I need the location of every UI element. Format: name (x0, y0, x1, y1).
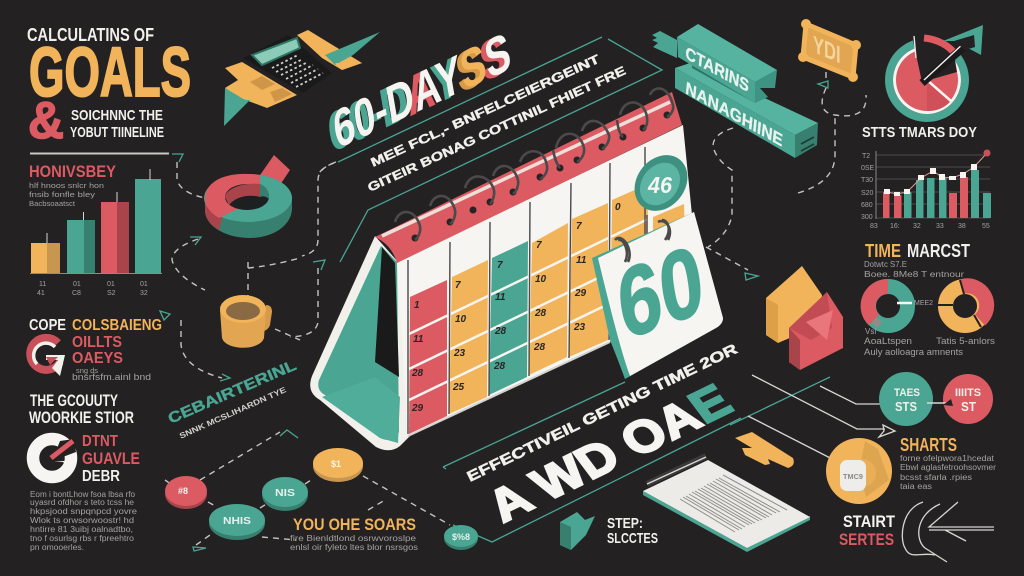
teal day tag: 46 (647, 172, 672, 198)
day numbers: 29 (574, 288, 587, 299)
day numbers: 28 (411, 368, 424, 379)
chart y labels: T30 (861, 177, 873, 184)
day numbers: 10 (535, 274, 547, 285)
panel: cope collaborating (29, 317, 162, 382)
day numbers: 7 (455, 280, 461, 291)
node: teal large: NHIS (223, 516, 251, 527)
panel: the county workie stior: DEBR (82, 468, 120, 485)
day numbers: 10 (455, 314, 467, 325)
body paragraph: tno f osurlsg rbs r fpreehtro (30, 534, 135, 543)
banner: effective time: EFFECTIVEIL GETING TIME 2OR (465, 341, 741, 486)
day numbers: 28 (533, 342, 546, 353)
text box: intro banner: MEE FCL,- BNFELCEIERGEINT (369, 52, 602, 170)
icon: pie chart with arrow (889, 25, 983, 118)
day numbers: 25 (452, 382, 465, 393)
callout: start series: SERTES (839, 530, 894, 549)
spiral rings (395, 88, 673, 242)
body paragraph: hkpsjood snpqnpcd yovre (30, 507, 138, 516)
body paragraph: hntirre 81 3uibj oalnadtbo, (30, 525, 133, 534)
day numbers: 28 (493, 361, 506, 372)
node: small teal (444, 525, 478, 550)
block: channels teal top (652, 24, 777, 103)
body paragraph: pn omooerles. (30, 543, 84, 552)
node: yellow: $1 (331, 459, 341, 469)
text box: intro banner (318, 37, 662, 262)
block: management teal bottom (675, 63, 818, 158)
calendar face (397, 125, 692, 436)
panel: time market donuts: Vsl (865, 327, 876, 336)
panel: cope collaborating: OILLTS (72, 334, 122, 351)
icon: yellow sign: YDI (813, 31, 841, 69)
red binding bar (375, 92, 682, 263)
icon: yellow circle with badge: TMC9 (843, 474, 863, 481)
calendar base edge (408, 342, 610, 436)
bars (30, 169, 162, 274)
panel: time market donuts (864, 241, 996, 357)
timeline nodes (165, 357, 478, 550)
node: teal large (209, 504, 265, 540)
chart description: hlf hnoos snlcr hon (29, 181, 104, 190)
axis labels: 32 (140, 290, 148, 297)
block: management teal bottom: NANAGHIINE (685, 78, 784, 151)
icon: document sheet (643, 456, 810, 552)
icon: teal folder and step label: SLCCTES (607, 530, 658, 547)
chart description (29, 181, 104, 208)
node: teal circle: STS (895, 399, 917, 414)
panel: bar chart with heading (29, 162, 162, 297)
day numbers: 7 (576, 221, 582, 232)
panel: the county workie stior: WOORKIE STIOR (29, 408, 134, 427)
chart x labels: 55 (982, 223, 990, 230)
panel: time market donuts: Boee. 8Me8 T entnour (864, 270, 964, 279)
body paragraph (30, 490, 138, 552)
heading: goals: GOALS (29, 33, 191, 111)
day numbers: 11 (495, 292, 506, 303)
chart bars (883, 170, 991, 218)
chart x labels (870, 223, 990, 230)
chart y labels (861, 153, 875, 221)
panel: the county workie stior: GUAVLE (82, 449, 140, 468)
axis labels: C8 (72, 290, 81, 297)
title: 60-days isometric: 60-DAYSS (324, 25, 510, 164)
icon: isometric calculator with arrows (224, 30, 380, 126)
panel: cope collaborating: bnsrfsfm.ainl bnd (72, 372, 151, 382)
node: small teal: $%8 (452, 532, 470, 542)
panel: sharts: bcsst sfarla .rpies (900, 473, 972, 482)
day numbers: 1 (414, 300, 420, 311)
panel: time market donuts: AoaLtspen (864, 336, 912, 346)
node: yellow (313, 448, 363, 482)
block: channels teal top: CTARINS (685, 43, 750, 96)
icon: teal folder and step label: STEP: (607, 515, 643, 532)
title block: goals (27, 25, 191, 150)
heading: calculations of: CALCULATINS OF (27, 25, 154, 45)
day numbers: 11 (576, 255, 587, 266)
icon: 3D ring (204, 155, 292, 238)
panel: sharts: taia eas (900, 482, 932, 491)
chart x labels: 16: (890, 223, 900, 230)
panel: sharts: Ebwl aglasfetroohsovmer (900, 463, 996, 472)
body paragraph: Wlok ts orwsorwoostr! hd (30, 516, 134, 525)
heading: stats: STTS TMARS DOY (862, 124, 977, 141)
panel: sharts: forne ofelpwora1hcedat (900, 454, 995, 463)
node: red: #8 (178, 486, 188, 496)
node: red circle: IIIITS (955, 387, 981, 399)
axis labels: 01 (107, 281, 115, 288)
node: teal medium: NIS (275, 488, 295, 499)
axis labels: 41 (37, 290, 45, 297)
panel: description label: CEBAIRTERINL (166, 357, 299, 428)
icon: isometric envelopes (766, 266, 843, 370)
callout: start series: STAIRT (843, 512, 896, 531)
day numbers: 0 (615, 202, 621, 213)
text box: intro banner: GITEIR BONAG COTTINIL FHIET FRE (366, 64, 628, 195)
panel: description label (166, 357, 299, 441)
axis labels (37, 281, 148, 297)
panel: time market donuts: TIME (865, 241, 901, 261)
ampersand: & (28, 92, 64, 150)
chart heading: HONIVSBEY (29, 162, 117, 181)
panel: the county workie stior (29, 391, 140, 552)
chart y labels: 680 (861, 202, 873, 209)
caption: you ohe soars (290, 515, 418, 552)
banner: effective time (443, 341, 830, 542)
icon: G red ring (30, 338, 65, 376)
donut: right (938, 280, 987, 327)
chart y labels: T2 (862, 153, 870, 160)
node: red (165, 476, 207, 509)
day numbers: 29 (411, 403, 424, 414)
chart y labels: 0SE (861, 165, 875, 172)
day numbers: 11 (413, 334, 424, 345)
panel: sharts: SHARTS (900, 435, 957, 455)
day numbers: 23 (453, 348, 466, 359)
day numbers: 7 (536, 240, 542, 251)
panel: cope collaborating: COLSBAIENG (72, 317, 162, 334)
chart y labels: S20 (861, 190, 874, 197)
chart description: fnsib fonfle bley (29, 190, 95, 199)
day columns (409, 184, 686, 434)
icon: yellow sign (798, 19, 861, 82)
caption: you ohe soars: YOU OHE SOARS (293, 515, 416, 534)
callout: start series (839, 512, 896, 549)
day numbers: 7 (497, 260, 503, 271)
chart x labels: 33 (936, 223, 944, 230)
body paragraph: Eom i bontLhow fsoa lbsa rfo (30, 490, 136, 499)
icon: yellow circle with badge (826, 438, 892, 504)
chart y labels: 300 (861, 214, 873, 221)
panel: time market donuts: Dotwtc S7.E (864, 260, 907, 269)
banner: effective time: A WD OA E (478, 376, 742, 532)
tear-off page 60: 60 (611, 225, 710, 361)
panel: the county workie stior: DTNT (82, 433, 118, 450)
axis labels: 01 (140, 281, 148, 288)
caption: you ohe soars: fire Bienldtlond osrwvoroslpe (290, 534, 417, 543)
calendar stand (310, 236, 410, 450)
panel: the county workie stior: THE GCOUUTY (30, 391, 118, 410)
day numbers: 23 (573, 322, 586, 333)
chart x labels: 38 (958, 223, 966, 230)
donut: left: MEE2 (914, 300, 933, 307)
icon: G logo (33, 439, 76, 477)
day numbers: 28 (534, 308, 547, 319)
icon: curved arrow lines (902, 502, 994, 562)
panel: cope collaborating: OAEYS (72, 350, 123, 367)
subheading: SOICHNNC THE (71, 107, 163, 124)
main calendar (310, 88, 723, 450)
panel: time market donuts: Auly aolloagra amnents (864, 347, 964, 357)
node: teal medium (262, 477, 308, 511)
dashed connector lines (160, 72, 866, 551)
panel: time market donuts: MARCST (907, 241, 970, 261)
title: 60-days isometric: 60-DAYSS (329, 22, 515, 161)
axis labels: 11 (39, 281, 46, 288)
axis labels: S2 (107, 290, 116, 297)
connector lines right (748, 375, 895, 463)
icon: teal folder and step label (560, 512, 658, 550)
panel: description label: SNNK MCSLIHARDN TYE (178, 385, 288, 441)
node: teal circle (879, 372, 933, 426)
body paragraph: uyasrd ofdhor s teto tcss he (30, 498, 135, 507)
panel: cope collaborating: sng ds (76, 368, 99, 375)
chart: bars and line (861, 150, 991, 230)
icon: yellow wedge (735, 432, 794, 468)
icon: coffee mug (220, 295, 272, 348)
node: teal circle: TAES (894, 387, 920, 399)
panel: sharts (900, 435, 996, 491)
caption: you ohe soars: enlsl oir fyleto ltes blor nsrsgos (290, 543, 418, 552)
node: red circle: ST (961, 399, 976, 414)
panel: cope collaborating: COPE (29, 317, 66, 334)
chart trend line (884, 150, 990, 196)
chart x labels: 83 (870, 223, 878, 230)
chart x labels: 32 (913, 223, 921, 230)
axis labels: 01 (73, 281, 81, 288)
chart description: Bacbsoaatsct (29, 199, 76, 208)
node: red circle (927, 374, 993, 424)
teal day tag (624, 145, 698, 262)
panel: time market donuts: Tatis 5-anlors (936, 336, 996, 346)
day numbers (411, 202, 621, 414)
subheading line two: YOBUT TIINELINE (70, 124, 164, 141)
day numbers: 28 (494, 326, 507, 337)
